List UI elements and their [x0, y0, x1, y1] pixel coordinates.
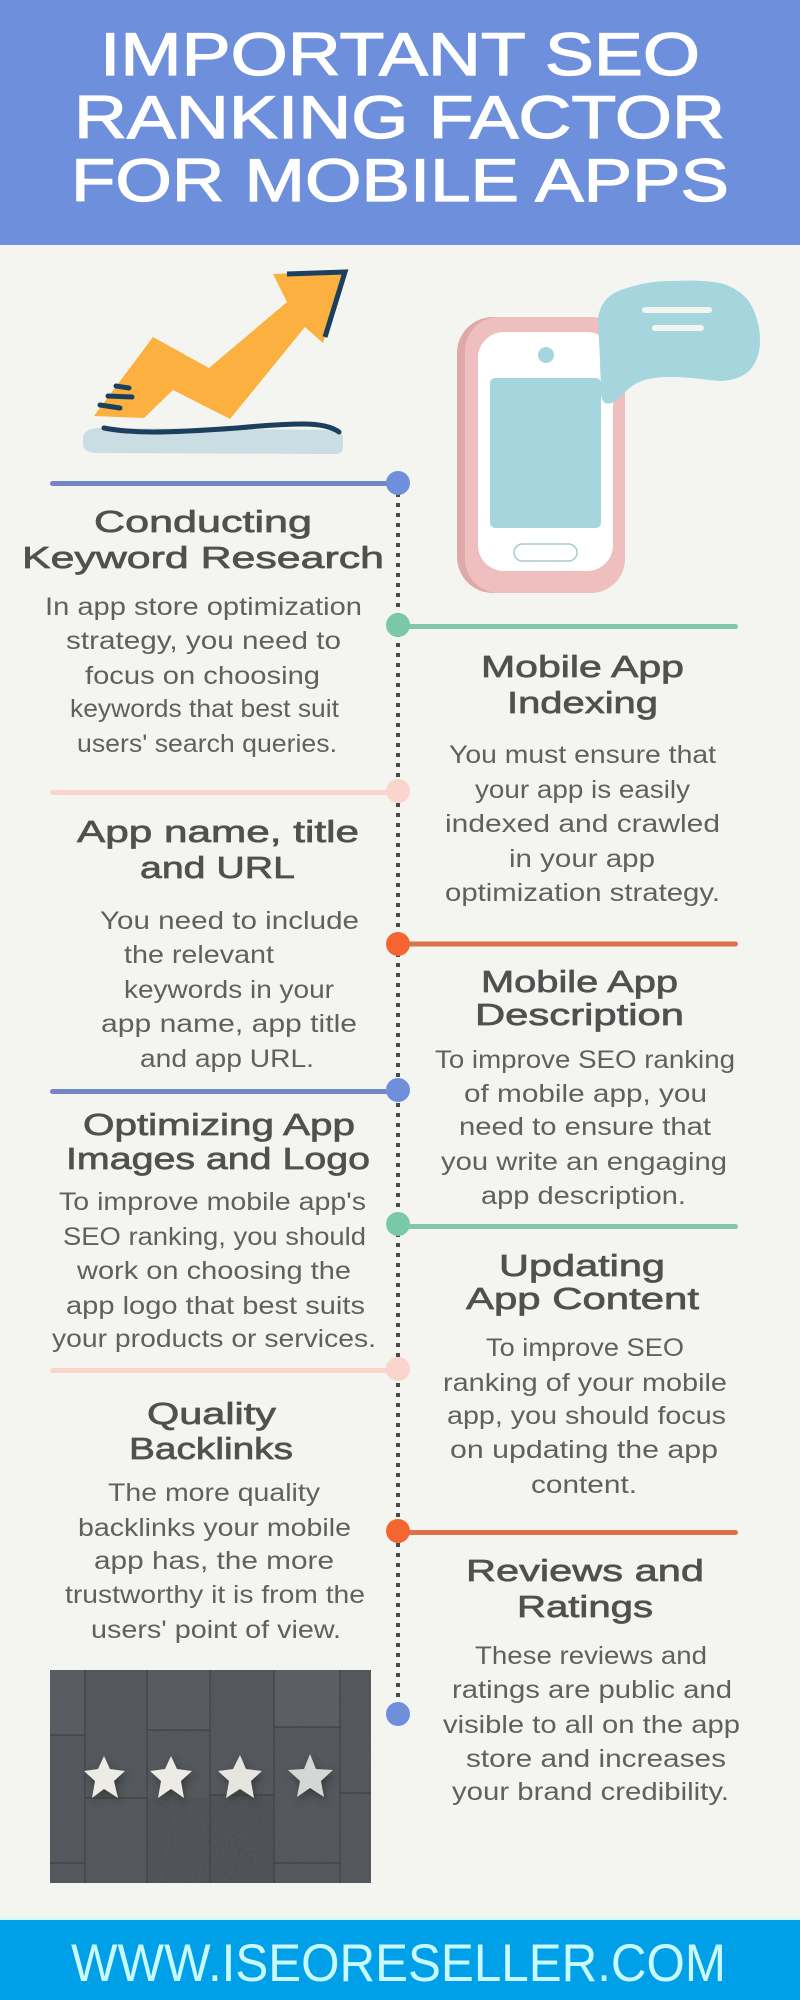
timeline node: Mobile App Description: [386, 932, 738, 956]
panel: Reviews and Ratings: visible to all on the app: [443, 1711, 740, 1739]
panel: Optimizing App Images and Logo: SEO ranking, you should: [63, 1223, 366, 1251]
panel: App name, title and URL: App name, title: [77, 814, 359, 849]
timeline node: Quality Backlinks: [50, 1357, 410, 1381]
panel: Mobile App Description: Mobile App: [481, 964, 678, 999]
panel: Updating App Content: on updating the app: [450, 1436, 718, 1464]
panel: Mobile App Description: To improve SEO ranking: [435, 1046, 735, 1074]
panel: Quality Backlinks: backlinks your mobile: [78, 1514, 351, 1542]
panel: Conducting Keyword Research: focus on choosing: [85, 662, 320, 690]
photo: four stars on a concrete wall: [50, 1670, 371, 1883]
panel: Conducting Keyword Research: keywords that best suit: [70, 695, 339, 723]
panel: Reviews and Ratings: Ratings: [517, 1589, 653, 1624]
panel: Updating App Content: [443, 1248, 727, 1499]
panel: Quality Backlinks: users' point of view.: [91, 1616, 341, 1644]
panel: Optimizing App Images and Logo: your products or services.: [52, 1325, 376, 1353]
timeline node: Updating App Content: [386, 1212, 738, 1236]
timeline node: Conducting Keyword Research: [50, 471, 410, 495]
panel: Reviews and Ratings: your brand credibility.: [452, 1778, 729, 1806]
footer banner with website URL: [0, 1917, 800, 2000]
title banner: [0, 0, 800, 245]
panel: Conducting Keyword Research: strategy, you need to: [66, 627, 341, 655]
panel: Quality Backlinks: The more quality: [108, 1479, 321, 1507]
icon: rising growth arrow: [83, 271, 345, 454]
panel: App name, title and URL: and URL: [140, 850, 295, 885]
title banner: RANKING FACTOR: [74, 84, 725, 151]
timeline node: Mobile App Indexing: [386, 613, 738, 637]
panel: Mobile App Description: [435, 964, 735, 1210]
panel: Updating App Content: ranking of your mobile: [443, 1369, 727, 1397]
panel: Optimizing App Images and Logo: Images and Logo: [66, 1141, 370, 1176]
panel: App name, title and URL: keywords in your: [124, 976, 334, 1004]
panel: App name, title and URL: [77, 814, 359, 1073]
panel: Conducting Keyword Research: Conducting: [94, 504, 312, 539]
panel: Mobile App Indexing: in your app: [509, 845, 655, 873]
panel: Updating App Content: Updating: [499, 1248, 665, 1283]
title banner: IMPORTANT SEO: [100, 21, 700, 88]
title banner: FOR MOBILE APPS: [71, 147, 729, 214]
panel: Quality Backlinks: trustworthy it is from the: [65, 1581, 365, 1609]
panel: Optimizing App Images and Logo: [52, 1107, 376, 1353]
panel: App name, title and URL: and app URL.: [140, 1045, 314, 1073]
panel: Updating App Content: content.: [531, 1471, 637, 1499]
panel: Quality Backlinks: Backlinks: [129, 1431, 293, 1466]
timeline end node: [386, 1702, 410, 1726]
panel: Conducting Keyword Research: In app store optimization: [45, 593, 362, 621]
panel: Optimizing App Images and Logo: To improve mobile app's: [59, 1188, 366, 1216]
panel: Quality Backlinks: Quality: [147, 1396, 277, 1431]
panel: Mobile App Description: need to ensure that: [459, 1113, 711, 1141]
panel: Mobile App Indexing: optimization strategy.: [445, 879, 720, 907]
panel: Conducting Keyword Research: users' search queries.: [77, 730, 337, 758]
panel: Optimizing App Images and Logo: app logo that best suits: [66, 1292, 365, 1320]
panel: Optimizing App Images and Logo: Optimizing App: [83, 1107, 355, 1142]
icon: phone with speech bubble: [457, 281, 760, 593]
panel: Mobile App Description: app description.: [481, 1182, 686, 1210]
panel: Mobile App Indexing: indexed and crawled: [445, 810, 720, 838]
panel: Reviews and Ratings: store and increases: [466, 1745, 726, 1773]
panel: App name, title and URL: app name, app title: [101, 1010, 357, 1038]
panel: App name, title and URL: You need to include: [100, 907, 359, 935]
panel: Optimizing App Images and Logo: work on choosing the: [76, 1257, 351, 1285]
panel: Mobile App Description: of mobile app, you: [464, 1080, 707, 1108]
panel: Reviews and Ratings: [443, 1553, 740, 1806]
panel: Mobile App Indexing: You must ensure that: [449, 741, 716, 769]
dotted timeline spine: [396, 483, 400, 1714]
panel: Mobile App Indexing: Indexing: [507, 685, 658, 720]
footer banner with website URL: WWW.ISEORESELLER.COM: [71, 1934, 726, 1993]
panel: Reviews and Ratings: ratings are public and: [452, 1676, 732, 1704]
panel: Mobile App Indexing: [445, 649, 720, 907]
panel: Mobile App Description: Description: [475, 997, 684, 1032]
panel: Updating App Content: app, you should focus: [447, 1402, 726, 1430]
panel: Quality Backlinks: app has, the more: [94, 1547, 334, 1575]
panel: Reviews and Ratings: Reviews and: [466, 1553, 704, 1588]
panel: Conducting Keyword Research: [22, 504, 384, 758]
panel: Conducting Keyword Research: Keyword Research: [22, 540, 384, 575]
timeline node: App name, title and URL: [50, 779, 410, 803]
panel: App name, title and URL: the relevant: [124, 941, 274, 969]
timeline node: Reviews and Ratings: [386, 1519, 738, 1543]
panel: Updating App Content: App Content: [466, 1281, 700, 1316]
panel: Updating App Content: To improve SEO: [486, 1334, 684, 1362]
panel: Mobile App Indexing: your app is easily: [475, 776, 691, 804]
timeline node: Optimizing App Images and Logo: [50, 1078, 410, 1102]
panel: Mobile App Description: you write an engaging: [441, 1148, 727, 1176]
panel: Mobile App Indexing: Mobile App: [481, 649, 684, 684]
panel: Reviews and Ratings: These reviews and: [475, 1642, 707, 1670]
panel: Quality Backlinks: [65, 1396, 365, 1644]
